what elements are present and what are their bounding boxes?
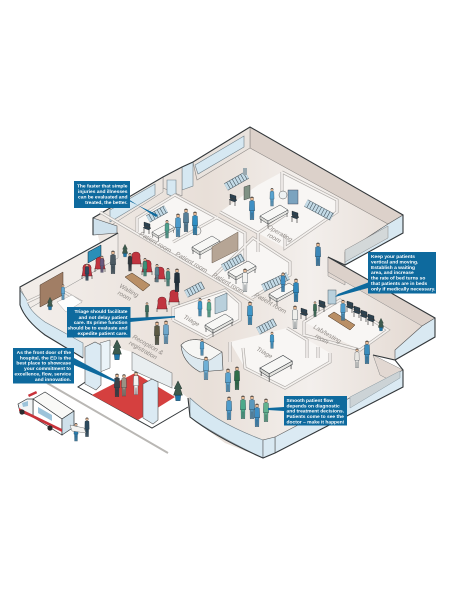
- furniture: [40, 168, 355, 382]
- callout: vertical: Establish a waiting: [371, 265, 415, 271]
- registrar desk: [57, 295, 82, 312]
- floor: [20, 127, 435, 458]
- icon: ambulance: [18, 391, 89, 441]
- callout: front door: your commitment to: [24, 366, 71, 372]
- room label: Patient room: [174, 251, 208, 275]
- labels: [114, 224, 343, 363]
- callout: smooth flow: depends on diagnostic: [286, 404, 340, 410]
- callout: front door: and innovation.: [35, 377, 72, 383]
- room label: Patient room: [211, 272, 245, 296]
- callout: triage: expedite patient care.: [77, 331, 128, 337]
- callout: vertical: [335, 252, 436, 297]
- callout: vertical: Keep your patients: [371, 254, 415, 260]
- TV: [88, 245, 101, 263]
- callout: triage: [67, 307, 175, 338]
- room label: Triage: [255, 346, 274, 361]
- callout: smooth flow: [268, 396, 347, 426]
- callout: simple injuries: [74, 181, 158, 217]
- callout: triage: care. Its prime function: [74, 320, 128, 326]
- room label: Operating: [266, 224, 293, 244]
- wall panel: [100, 340, 110, 372]
- cabinets: [148, 209, 166, 219]
- room label: Patient room: [253, 292, 287, 316]
- callout: smooth flow: and treatment decisions.: [286, 408, 345, 414]
- callout: vertical: area, and increase: [371, 270, 414, 276]
- callout: smooth flow: Patients come to see the: [286, 414, 344, 420]
- callout: vertical: only if medically necessary.: [371, 286, 436, 292]
- callout: front door: As the front door of the: [17, 350, 71, 356]
- reception desk: [181, 340, 223, 372]
- room label: Triage: [182, 314, 201, 329]
- callout: front door: best place to showcase: [16, 360, 71, 366]
- callout: simple injuries: injuries and illnesses: [78, 189, 128, 195]
- callout: smooth flow: Smooth patient flow: [286, 398, 333, 404]
- shelf: [215, 293, 227, 314]
- callout: front door: hospital, the ED is the: [20, 356, 71, 362]
- room label: Patient room: [138, 231, 172, 255]
- callout: triage: and not delay patient: [79, 315, 128, 321]
- room label: Reception &: [131, 334, 164, 357]
- callout: triage: Triage should facilitate: [74, 309, 128, 315]
- beds: [152, 223, 174, 242]
- callout: vertical: the rate of bed turns so: [371, 276, 425, 282]
- front curved walls: [190, 398, 263, 458]
- room floors: [137, 172, 388, 388]
- curtain: [212, 232, 238, 263]
- room walls: [27, 172, 388, 388]
- room label: room: [314, 333, 330, 346]
- room label: room: [266, 232, 282, 245]
- entrance slab: [78, 355, 188, 428]
- brown doors: [40, 272, 63, 307]
- callout: simple injuries: can be evaluated and: [78, 194, 128, 200]
- people: [47, 188, 384, 427]
- room label: Lab/testing: [312, 324, 342, 345]
- pillar left: [85, 342, 101, 390]
- entrance: [78, 340, 188, 428]
- back walls: [250, 127, 403, 224]
- callout: front door: excellence, flow, service: [14, 372, 71, 378]
- right side back wing: [345, 215, 403, 265]
- doors: [132, 352, 172, 388]
- road line: [47, 383, 168, 453]
- pillar right: [143, 379, 158, 424]
- callout: triage: should be to evaluate and: [67, 326, 128, 332]
- lab table: [328, 312, 355, 330]
- callout: simple injuries: The faster that simple: [77, 184, 128, 190]
- callout: simple injuries: treated, the better.: [85, 200, 128, 206]
- red carpet: [92, 373, 175, 420]
- callout: smooth flow: doctor – make it happen!: [286, 420, 345, 426]
- callout: vertical: that patients are in beds: [371, 281, 428, 287]
- callout: front door: [13, 348, 115, 384]
- floor plan building: [20, 127, 435, 458]
- outline strokes: [20, 127, 435, 458]
- room label: registration: [128, 340, 158, 362]
- waiting table: [125, 273, 150, 291]
- callout: vertical: vertical and moving.: [371, 260, 419, 266]
- room label: room: [116, 290, 132, 303]
- room label: Waiting: [118, 283, 140, 299]
